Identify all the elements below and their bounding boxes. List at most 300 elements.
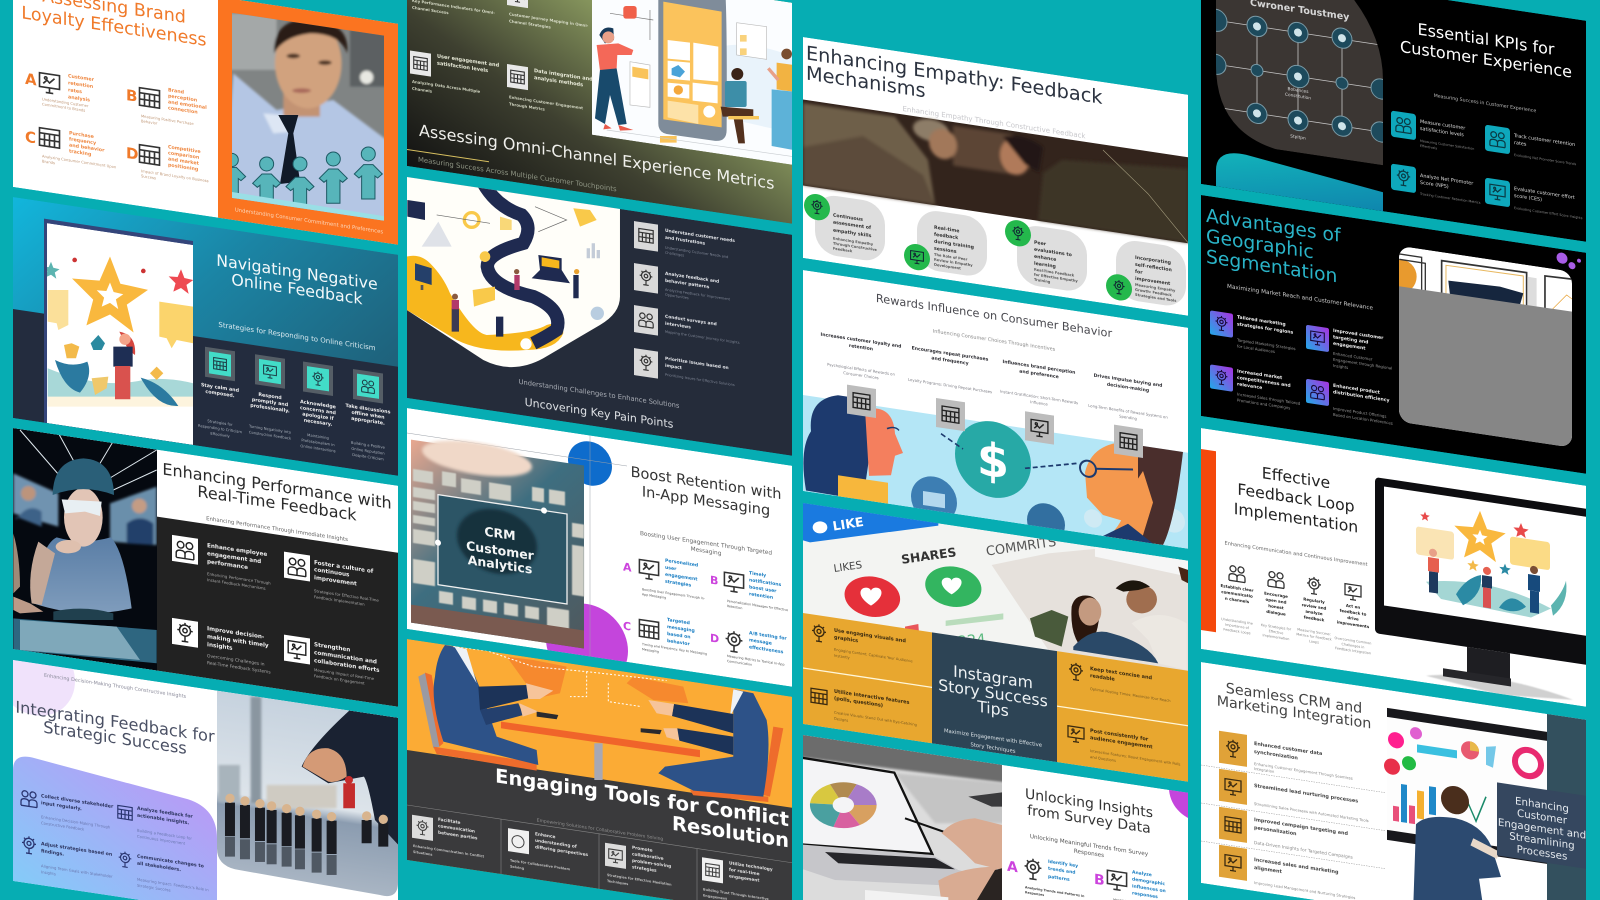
card: technology: engagement [729, 873, 759, 884]
card: peer evaluations [1005, 218, 1087, 294]
step: take offline: Take discussions [346, 403, 391, 416]
item: improved targeting: Enhanced Customer [1333, 351, 1373, 362]
column: loyalty: Psychological Effects of Rewards on [827, 362, 895, 377]
illustration: phone and team [592, 0, 792, 165]
card: communication: between parties [438, 830, 478, 842]
row: data synchronization [1219, 731, 1353, 786]
item: tailored marketing: for Local Audiences [1237, 343, 1275, 354]
step: encourage dialogue: Key Strategies for [1261, 623, 1292, 632]
teal shape [1216, 150, 1383, 211]
item A: Analyzing Trends and Patterns in [1025, 885, 1085, 898]
step: establish channels: Importance of [1225, 623, 1250, 630]
step: review feedback: Measuring Success: [1297, 627, 1331, 636]
item: decision-making: Overcoming Challenges in [207, 653, 265, 668]
item B: boost user [749, 584, 777, 595]
photo: social reactions and smiling couple: COMMRITS [985, 535, 1057, 560]
card: real-time feedback: Review in Empathy [934, 258, 973, 268]
step: stay calm: Stay calm and [201, 382, 240, 394]
card: technology [702, 856, 773, 900]
tip: visuals: graphics [834, 635, 858, 644]
item: analyze feedback: Opportunities [665, 293, 689, 300]
item: adjust: Insights [41, 869, 56, 876]
step: acknowledge: Acknowledge [300, 399, 337, 411]
item C: Messaging [642, 647, 659, 654]
card: communication: Facilitate [438, 817, 461, 826]
column: brand perception: and preference [1019, 368, 1059, 380]
item: employee engagement [172, 535, 271, 592]
item D: and market [168, 156, 200, 167]
item: market competitiveness: Increased market [1237, 368, 1283, 381]
column: brand perception [1000, 359, 1078, 448]
item: engagement [410, 50, 499, 93]
subtitle: Understanding Challenges to Enhance Solutions [519, 378, 680, 410]
item: understand needs: and frustrations [665, 235, 705, 247]
title: Mechanisms [806, 62, 926, 102]
title: Unlocking Insights [1025, 786, 1153, 821]
subtitle: Enhancing Performance Through Immediate Insights [206, 516, 348, 543]
illustration: customer journey road [407, 167, 620, 367]
row: lead nurturing: Streamlining Sales Processes with Automated Marketing Tools [1254, 802, 1369, 823]
item: market competitiveness: competitiveness and [1237, 375, 1291, 389]
card: collaborative strategies: Promote [632, 845, 653, 854]
item D: Competitive [168, 144, 201, 155]
divider [407, 149, 489, 162]
tip: concise text: readable [1090, 673, 1115, 683]
KPI: CES: score (CES) [1514, 193, 1542, 203]
tip: interactive: Designs [834, 717, 848, 723]
row: lead nurturing: Streamlined lead nurturing processes [1254, 783, 1358, 805]
monitor with illustration [1375, 477, 1590, 708]
item B: Measuring Positive Purchase [141, 114, 194, 126]
column: brand perception: Instant Gratification: Short-Term Rewards [1000, 389, 1078, 405]
step: review feedback: Metrics for Feedback [1296, 632, 1332, 642]
item D: Success [141, 174, 156, 180]
row: sales alignment [1219, 845, 1355, 900]
card: continuous assessment: Through Constructive [833, 242, 877, 252]
item C: Targeted [667, 617, 690, 626]
item: prioritize [634, 348, 735, 390]
subtitle: Maximizing Market Reach and Customer Relevance [1227, 284, 1373, 312]
item: understand needs [634, 221, 735, 265]
row: lead nurturing [1219, 769, 1369, 823]
subtitle: Empowering Solutions for Collaborative Problem Solving [537, 817, 663, 842]
card: collaborative strategies: problem-solving [632, 858, 671, 870]
item: market competitiveness: Promotions and Campaigns [1237, 397, 1290, 410]
column: loyalty: Consumer Choices [843, 370, 879, 380]
card: communication [412, 813, 485, 865]
step: establish channels: Understanding the [1221, 617, 1253, 626]
item: employee engagement: Enhance employee [207, 543, 267, 558]
item: integration: Enhancing Customer Engagement [509, 94, 583, 110]
item C: tracking [69, 148, 92, 158]
step: encourage dialogue: dialogue [1266, 609, 1286, 617]
item C: Timing and Frequency: Key to Messaging [641, 642, 707, 656]
card: peer evaluations: Peer [1034, 240, 1047, 248]
slide: Effective Feedback Loop Implementation [1201, 428, 1590, 708]
item: integration: Data integration and [534, 68, 593, 83]
network labels: Bobances [1288, 86, 1309, 95]
card: real-time feedback: sessions [934, 246, 957, 255]
item: engagement: Analyzing Data Across Multiple [412, 79, 481, 94]
KPI: satisfaction [1391, 110, 1474, 156]
item: analyze feedback: Analyzing Feedback for Improvement [665, 288, 731, 302]
KPI: retention: rates [1514, 140, 1527, 148]
slide: Essential KPIs for Customer Experience [1201, 0, 1586, 242]
item D: positioning [168, 162, 199, 173]
photo: CRM customer analytics screen [411, 433, 584, 649]
item: analyze: Building a Feedback Loop for [137, 828, 192, 841]
item: improved targeting: targeting and [1333, 334, 1368, 346]
tip: consistency: Post consistently for [1090, 728, 1149, 743]
item A: App Messaging [642, 592, 666, 600]
column: loyalty [821, 332, 901, 422]
item C: and behavior [69, 142, 105, 154]
item: adjust: Adjust strategies based on [41, 841, 112, 858]
item: key performance: Customer Journey Mapping in Omni- [509, 11, 589, 28]
card: peer evaluations: for Effective Empathy [1034, 273, 1078, 283]
title: Essential KPIs for [1417, 20, 1555, 59]
item A: analysis [68, 94, 90, 104]
item B: responses [1132, 890, 1158, 900]
step: act on feedback: Overcoming Common [1335, 636, 1371, 646]
step: respond [248, 353, 292, 441]
item: communication: Feedback on Engagement [314, 673, 365, 686]
title: Story Success [938, 675, 1048, 711]
item: market competitiveness: Increased Sales through Tailored [1237, 391, 1301, 406]
item: prioritize: impact [665, 363, 682, 371]
item: product distribution: Improved Product Offerings [1333, 406, 1386, 419]
card: self-reflection: Strategies and Tools [1135, 293, 1176, 303]
row: data synchronization: synchronization [1254, 749, 1298, 762]
caption box: Processes [1517, 843, 1567, 863]
item: communicate: Strategic Success [137, 883, 171, 893]
tip: consistency: and Questions [1090, 755, 1116, 763]
gradient panel [13, 755, 217, 900]
slide: Instagram Story Success Tips [795, 441, 1188, 782]
item B [1094, 864, 1166, 900]
item: analyze feedback: Analyze feedback and [665, 271, 719, 285]
item D: D [710, 632, 719, 646]
item B: B [710, 574, 718, 588]
decorative dots [1556, 252, 1581, 270]
item: analyze: Continuous Improvement [137, 834, 186, 846]
item: communicate: Communicate changes to [137, 854, 205, 870]
item: analyze [118, 803, 193, 847]
item D: message [749, 638, 772, 647]
row: data synchronization: Integration [1254, 767, 1275, 774]
item: collect input: Enhancing Decision-Making Through [41, 814, 111, 830]
column: brand perception: Influences brand perception [1003, 359, 1075, 376]
item: decision-making: making with timely [207, 634, 269, 649]
item: adjust [22, 836, 112, 878]
column: loyalty: retention [849, 343, 873, 352]
slide: Uncovering Key Pain Points [407, 135, 792, 456]
item B: connection [168, 105, 198, 116]
step: act on feedback: drive [1347, 615, 1359, 622]
card: self-reflection: for [1135, 269, 1143, 276]
item: communication: Measuring Impact of Real-Time [314, 667, 375, 681]
title: Segmentation [1206, 247, 1337, 287]
card: continuous assessment: assessment of [833, 220, 872, 231]
title: Rewards Influence on Consumer Behavior [876, 291, 1112, 340]
subtitle: Understanding Consumer Commitment and Preferences [235, 207, 383, 236]
column: impulse buying [1088, 372, 1168, 462]
card: self-reflection: Growth: Feedback [1135, 288, 1172, 297]
item: employee engagement: Instant Feedback Mechanisms [207, 577, 266, 591]
KPI: NPS [1391, 164, 1481, 205]
step: stay calm: Effectively [210, 432, 230, 439]
item B: Retention [727, 604, 742, 610]
item: communication: communication and [314, 650, 377, 666]
card: continuous assessment [804, 191, 885, 263]
subtitle: Measuring Success in Customer Experience [1434, 93, 1536, 114]
tip: concise text: Optimal Posting Times: Maximize Your Reach [1090, 687, 1170, 703]
KPI: satisfaction: Measure customer [1420, 119, 1466, 132]
item A: user [665, 565, 677, 573]
item: product distribution: Based on Location Preferences [1333, 412, 1393, 426]
item B: retention [749, 591, 773, 601]
card: real-time feedback: feedback [934, 232, 959, 241]
card: continuous assessment: empathy skills [833, 228, 872, 239]
card: peer evaluations: enhance [1034, 254, 1056, 263]
card: self-reflection: Incorporating [1135, 255, 1171, 266]
item: understand needs: Understand customer needs [665, 228, 735, 244]
title: Boost Retention with [631, 464, 781, 503]
column: repeat purchases [908, 345, 992, 435]
KPI: satisfaction: Measuring Customer Satisfaction [1420, 139, 1474, 151]
title: Online Feedback [231, 270, 363, 309]
item: tailored marketing: strategies for regions [1237, 321, 1293, 336]
item A: Responses [1025, 890, 1044, 897]
item B: notifications [749, 577, 782, 588]
step: respond: Respond [258, 392, 282, 401]
item: surveys: Conduct surveys and [665, 314, 717, 327]
column: impulse buying: Spending [1119, 413, 1137, 421]
step: encourage dialogue: Effective [1269, 629, 1283, 635]
photo: man with paper figures [232, 12, 384, 221]
item D [710, 624, 787, 672]
item: decision-making: Improve decision- [207, 626, 265, 641]
title: Customer Experience [1400, 37, 1572, 82]
step: encourage dialogue [1261, 570, 1292, 642]
item C: Purchase [69, 130, 95, 140]
item C [623, 610, 707, 661]
item: tailored marketing [1210, 310, 1296, 357]
item: employee engagement: performance [207, 559, 248, 571]
photo: woman with visor [13, 428, 157, 670]
item: product distribution [1306, 379, 1393, 426]
item B: Personalization Messages for Effective [727, 599, 788, 612]
step: acknowledge: Professionalism in [301, 438, 335, 447]
item B: B [1094, 872, 1105, 889]
item A: retention [68, 80, 94, 90]
network labels: Stpltpn [1290, 133, 1306, 142]
item: decision-making: Real-Time Feedback Systems [207, 660, 271, 676]
orange accent bar [1201, 449, 1216, 632]
step: acknowledge: Online Interactions [300, 444, 336, 453]
row: data synchronization: Enhanced customer data [1254, 741, 1322, 757]
item D: Communication [727, 659, 752, 667]
item A: Customer [68, 73, 95, 83]
item: engagement: Channels [412, 86, 433, 94]
item D: Measuring Metrics to Tactical In-App [727, 654, 784, 667]
title [1025, 786, 1153, 837]
card: peer evaluations: learning [1034, 261, 1056, 270]
step: establish channels: communicatio [1221, 589, 1253, 599]
caption box: Customer [1517, 807, 1568, 827]
item: employee engagement: engagement and [207, 551, 261, 565]
column: repeat purchases: Loyalty Programs: Driving Repeat Purchases [908, 377, 992, 394]
subtitle: Influencing Consumer Choices Through Incentives [933, 328, 1056, 353]
right tips panel [1057, 651, 1188, 782]
tip: visuals [812, 623, 913, 670]
title: Seamless CRM and [1226, 681, 1362, 717]
photo: man at whiteboard [1384, 707, 1547, 900]
step: respond: Constructive Feedback [249, 430, 292, 441]
item A: Commitment to Brands [42, 102, 85, 113]
photo: hand placing red figure [217, 690, 398, 896]
network labels: Constitution [1285, 92, 1311, 102]
title: In-App Messaging [642, 483, 770, 519]
item: communicate: Measuring Impact: Feedback's Role in [137, 877, 209, 892]
photo caption: Analytics [468, 552, 532, 577]
photo: social reactions and smiling couple: SHARES [900, 545, 957, 567]
card: collaborative strategies: collaborative [632, 851, 664, 862]
step: review feedback [1296, 574, 1332, 647]
step: take offline: appropriate. [351, 416, 385, 427]
item: communicate [118, 852, 208, 892]
step: stay calm: Responding to Criticism [198, 424, 242, 434]
slide: Boost Retention with In-App Messaging [407, 408, 792, 717]
step: act on feedback: Feedback Integration [1335, 646, 1371, 655]
column: loyalty: Increases customer loyalty and [821, 332, 901, 350]
item: culture of improvement: continuous [314, 567, 350, 579]
card: collaborative strategies: strategies [632, 864, 657, 874]
step: act on feedback: improvements [1337, 619, 1370, 629]
subtitle: Boosting User Engagement Through Targeted [640, 531, 772, 557]
card: real-time feedback: The Role of Peer [934, 253, 968, 262]
caption box: Enhancing [1515, 795, 1569, 815]
subtitle: Strategies for Responding to Online Criticism [218, 320, 376, 352]
item: decision-making: insights [207, 642, 233, 652]
title: Enhancing Performance with [162, 459, 392, 513]
step: establish channels: Establish clear [1220, 583, 1254, 593]
item D: D [126, 144, 138, 164]
photo: social reactions and smiling couple: LIKE [831, 514, 865, 534]
tip: concise text [1069, 662, 1170, 703]
item: improved targeting: Insights [1333, 363, 1348, 370]
step: respond: promptly and [252, 397, 289, 408]
photo: social reactions and smiling couple: 224 [957, 631, 987, 651]
item B: Brand [168, 87, 185, 96]
caption box [1497, 782, 1586, 869]
item: integration: Through Metrics [509, 101, 546, 112]
column: impulse buying: Long-Term Benefits of Reward Systems on [1088, 403, 1168, 420]
step: encourage dialogue: honest [1268, 603, 1284, 610]
item: integration: analysis methods [534, 75, 583, 88]
center title panel [932, 632, 1057, 762]
row: campaign targeting: personalization [1254, 825, 1297, 837]
tip: concise text: Keep text concise and [1090, 666, 1153, 681]
title: Engaging Tools for Conflict [495, 764, 789, 831]
title: Real-Time Feedback [197, 482, 357, 525]
left tips panel [803, 613, 932, 743]
tip: interactive [811, 685, 917, 733]
step: establish channels [1220, 564, 1254, 636]
item: analyze: Analyze feedback for [137, 806, 193, 820]
slide: Rewards Influence on Consumer Behavior [803, 270, 1188, 563]
item C [26, 126, 116, 168]
row: campaign targeting [1219, 807, 1353, 861]
tip: interactive: (polls, questions) [834, 696, 883, 709]
item D: Impact of Brand Loyalty on Business [141, 169, 209, 183]
item: collect input: Collect diverse stakeholder [41, 793, 114, 810]
item C: Analyzing Consumer Commitment Upon [42, 154, 117, 170]
card: collaborative strategies [605, 841, 672, 893]
item A: A [25, 70, 37, 90]
step: encourage dialogue: open and [1266, 597, 1287, 605]
item: surveys: interviews [665, 321, 691, 331]
subtitle: Enhancing Communication and Continuous Improvement [1225, 541, 1367, 568]
illustration: customers and coin [803, 390, 1188, 563]
KPI: NPS: Analyze Net Promoter [1420, 173, 1474, 187]
step: acknowledge: necessary. [304, 418, 332, 428]
item A [1007, 853, 1085, 900]
slide: Integrating Feedback for Strategic Success [13, 660, 398, 900]
title: Resolution [672, 812, 789, 852]
item B: perception [168, 93, 198, 104]
tip: interactive: Utilize interactive features [834, 689, 910, 706]
item: collect input: Constructive Feedback [41, 820, 85, 832]
item: key performance [412, 0, 588, 28]
photo caption: CRM [484, 524, 516, 543]
slide: Enhancing Empathy: Feedback Mechanisms [803, 37, 1188, 316]
tip: visuals: Instantly [834, 654, 850, 660]
item B: B [126, 86, 137, 106]
item C: C [25, 128, 36, 147]
illustration: two businessmen at table [418, 645, 783, 802]
title: Enhancing Empathy: Feedback [806, 42, 1103, 109]
title: Integrating Feedback for [15, 697, 215, 746]
subtitle: Maximize Engagement with Effective [944, 728, 1042, 749]
card: perspectives [508, 827, 588, 880]
step: acknowledge: Maintaining [307, 433, 329, 440]
step: stay calm [198, 346, 242, 440]
row: sales alignment: Improving Lead Management and Nurturing Strategies [1254, 881, 1355, 900]
item A: engagement [665, 572, 698, 583]
item: product distribution: Enhanced product [1333, 383, 1381, 396]
card: collaborative strategies: Techniques [607, 879, 628, 886]
KPI: CES: Evaluate customer effort [1514, 186, 1575, 201]
step: act on feedback: feedback to [1340, 608, 1367, 617]
item A: A [1007, 859, 1018, 876]
row: data synchronization: Enhancing Customer Engagement Through Seamless [1254, 762, 1353, 781]
item: culture of improvement: Feedback Implementation [314, 594, 365, 607]
row: sales alignment: Increased sales and marketing [1254, 857, 1339, 876]
network photo: customer journey [1205, 0, 1391, 169]
card: self-reflection: self-reflection [1135, 262, 1172, 273]
title: Navigating Negative [216, 251, 378, 294]
card: perspectives: understanding of [535, 838, 577, 850]
KPI: NPS: Score (NPS) [1420, 180, 1449, 190]
title: Tips [976, 697, 1009, 720]
card: peer evaluations: Training [1034, 278, 1051, 284]
column: impulse buying: Drives impulse buying and [1094, 373, 1162, 389]
item: communication: collaboration efforts [314, 658, 380, 674]
title: Implementation [1234, 499, 1358, 537]
title [1400, 17, 1572, 82]
step: act on feedback [1335, 582, 1371, 656]
